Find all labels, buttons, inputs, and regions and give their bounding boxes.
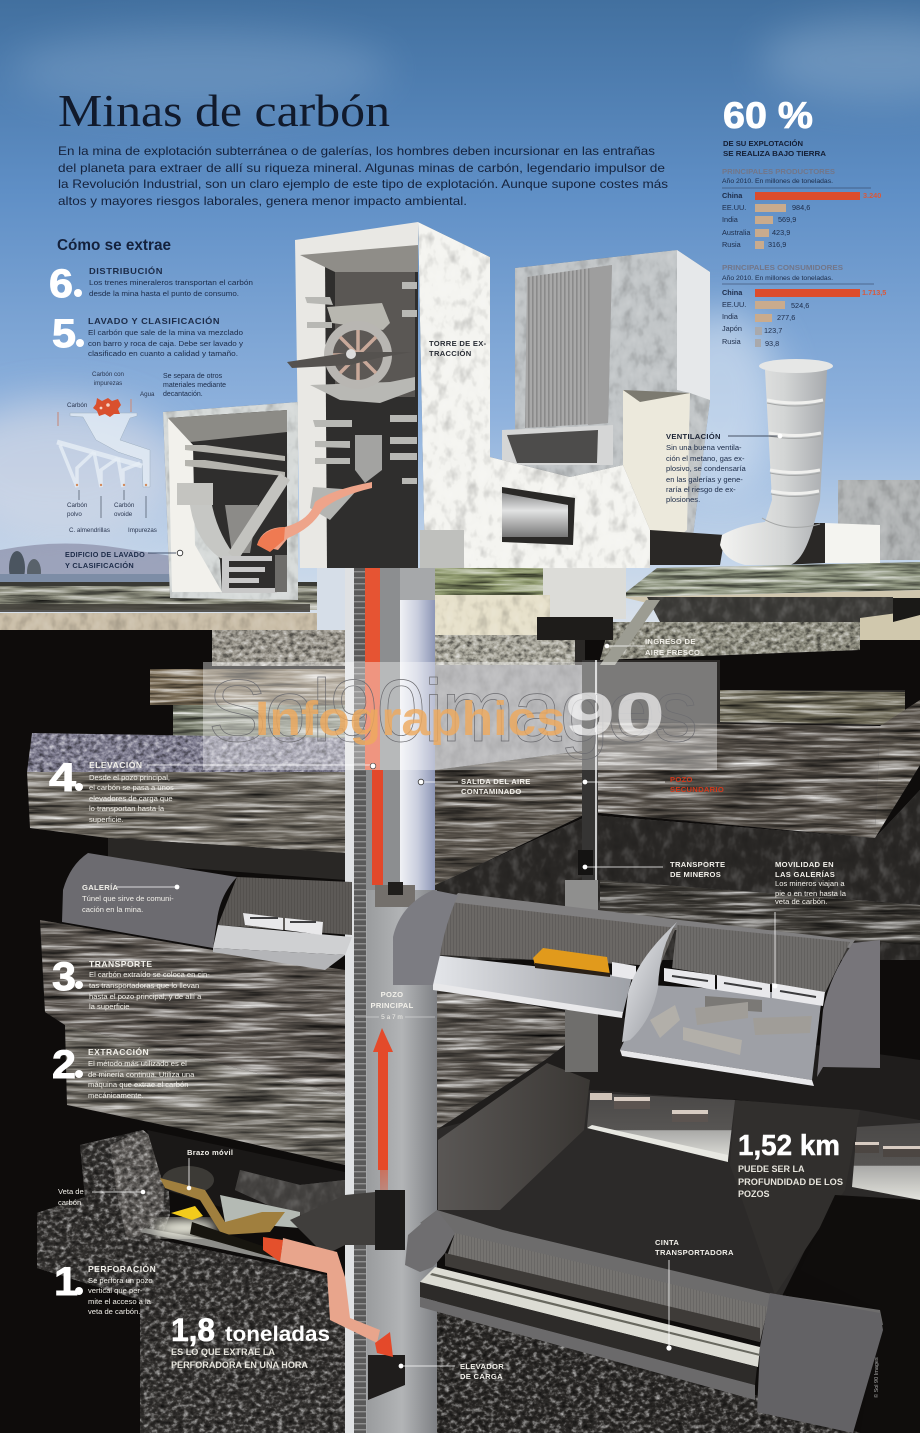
label: fresh air intake: AIRE FRESCO [645, 648, 700, 657]
chamber floor [620, 985, 822, 1080]
orange locomotive [533, 948, 610, 975]
label: ventilation: Sin una buena ventila- [666, 443, 742, 452]
washing diagram: Carbón [114, 502, 135, 509]
label: gallery mobility: veta de carbón. [775, 897, 827, 906]
rock block right of shaft [433, 986, 565, 1132]
step 5 [52, 312, 243, 358]
bar chart: top producers: 569,9 [778, 215, 796, 224]
step 6 [49, 262, 253, 306]
label: contaminated air exit: SALIDA DEL AIRE [461, 777, 531, 786]
label: coal seam: carbón [58, 1198, 81, 1207]
step 1: Se perfora un pozo [88, 1276, 153, 1285]
label: ventilation: plosiones. [666, 495, 700, 504]
stat: 1,52 km: 1,52 km [738, 1130, 840, 1162]
step 2: máquina que extrae el carbón [88, 1080, 188, 1089]
tower shelves [305, 282, 417, 484]
label: main shaft: PRINCIPAL [370, 1001, 414, 1010]
label: coal seam: Veta de [58, 1187, 84, 1196]
lower background mass [433, 990, 920, 1433]
label: gallery mobility: LAS GALERÍAS [775, 870, 835, 879]
bar chart: top consumers: EE.UU. [722, 300, 746, 309]
step 2: mecánicamente. [88, 1091, 144, 1100]
label: ventilation: en las galerías y gene- [666, 475, 743, 484]
step 2: El método más utilizado es el [88, 1059, 187, 1068]
lower rock under conveyor [405, 1300, 860, 1433]
step 4 [49, 756, 376, 824]
intro text: del planeta para extraer de allí su riqueza mineral. Algunas minas de carbón, legendario impulsor de [58, 161, 665, 175]
bar chart: top consumers: India [722, 312, 739, 321]
coal particles [93, 398, 121, 417]
label: ventilation: VENTILACIÓN [666, 432, 721, 441]
step 1: 1 [54, 1260, 78, 1304]
stat: 60 percent: 60 % [723, 95, 813, 136]
step 4: Desde el pozo principal, [89, 773, 170, 782]
label: gallery mobility [773, 860, 847, 988]
mine access box [290, 1190, 405, 1255]
stratum at level 3 [40, 920, 345, 1095]
main gallery arch [393, 890, 458, 985]
stat: 1,52 km: PUEDE SER LA [738, 1164, 805, 1174]
washing diagram: ovoide [114, 511, 133, 518]
hoist frame [327, 303, 390, 330]
stat: 1,8 toneladas: toneladas [225, 1323, 330, 1346]
bar chart: top consumers [722, 263, 886, 348]
label: secondary shaft: POZO [670, 775, 693, 784]
intro text: la Revolución Industrial, son un claro ejemplo de este tipo de explotación. Aunque supone costes más [58, 177, 668, 191]
intro text: altos y mayores riesgos laborales, genera menor impacto ambiental. [58, 194, 467, 208]
surface ground centre [397, 565, 626, 665]
washing diagram: Se separa de otros [163, 373, 223, 380]
stat: 60 percent: SE REALIZA BAJO TIERRA [723, 149, 827, 158]
bar chart: top producers: EE.UU. [722, 203, 746, 212]
step 3: la superficie [89, 1002, 130, 1011]
step 2: 2 [52, 1043, 76, 1087]
bar chart: top consumers: 277,6 [777, 313, 795, 322]
watermark white number: 90 [565, 681, 665, 748]
black underground background [0, 628, 920, 1433]
washing diagram: Carbón [67, 402, 88, 409]
bar chart: top producers: India [722, 215, 739, 224]
label: secondary shaft: SECUNDARIO [670, 785, 724, 794]
surface ground right [600, 562, 920, 660]
label: conveyor belt [655, 1238, 734, 1351]
arrows [58, 399, 131, 426]
bar chart: top producers: 423,9 [772, 228, 790, 237]
bar chart: top producers [722, 167, 881, 249]
washing diagram: impurezas [94, 380, 122, 387]
bar chart: top consumers: Rusia [722, 337, 742, 346]
label: secondary shaft [583, 775, 724, 794]
washing diagram: materiales mediante [163, 382, 226, 389]
label: movable arm [187, 1148, 233, 1190]
stat: 1,52 km [738, 1130, 843, 1199]
subheading: Cómo se extrae [57, 237, 171, 254]
label: coal seam [58, 1187, 145, 1207]
vent housing [650, 480, 920, 565]
upper rock strata left [150, 630, 353, 738]
washing diagram: Impurezas [128, 527, 157, 534]
orange coal path underground [263, 1237, 393, 1357]
conveyor near arch [405, 1210, 455, 1272]
mine chamber with drilling machine [140, 1130, 345, 1272]
secondary shaft [565, 600, 660, 1072]
washing diagram: polvo [67, 511, 82, 518]
bar chart: top producers: 3.240 [863, 191, 881, 200]
stat: 1,52 km: POZOS [738, 1189, 770, 1199]
washing diagram: Agua [140, 391, 155, 398]
stat: 1,8 toneladas [171, 1312, 330, 1370]
label: ventilation: raría el riesgo de ex- [666, 485, 736, 494]
cream column [623, 390, 690, 568]
washing diagram: Carbón con [92, 371, 125, 378]
label: cargo elevator: DE CARGA [460, 1372, 503, 1381]
parked wagons [650, 996, 812, 1055]
credit: © Sol 90 Images [873, 1357, 880, 1398]
bar chart: top consumers: 1.713,5 [862, 288, 886, 297]
label: ventilation: plosivo, se condensaría [666, 464, 747, 473]
intro text [58, 144, 668, 208]
step 4: el carbón se pasa a unos [89, 783, 174, 792]
conveyor far arch [757, 1293, 883, 1433]
bar chart: top producers: Rusia [722, 240, 742, 249]
label: gallery mobility: pie o en tren hasta la [775, 889, 847, 898]
bar chart: top consumers: China [722, 288, 743, 297]
step 3 [52, 955, 210, 1011]
watermark [203, 661, 717, 770]
label: main shaft: 5 a 7 m [381, 1014, 403, 1021]
back tunnel with wagons [587, 1093, 735, 1162]
label: gallery: GALERÍA [82, 883, 118, 892]
label: cargo elevator: ELEVADOR [460, 1362, 504, 1371]
stat: 1,8 toneladas: PERFORADORA EN UNA HORA [171, 1360, 308, 1370]
step 6: Los trenes mineraleros transportan el carbón [89, 278, 253, 287]
label: contaminated air exit [418, 777, 531, 796]
step 1: veta de carbón. [88, 1307, 140, 1316]
label: gallery mobility: Los mineros viajan a [775, 879, 845, 888]
bar chart: top producers: PRINCIPALES PRODUCTORES [722, 167, 835, 176]
dark cylindrical tunnel [438, 1063, 590, 1210]
step 1: mite el acceso a la [88, 1297, 152, 1306]
watermark orange wordmark: Infographics [255, 693, 565, 746]
step 2: de minería continua. Utiliza una [88, 1070, 195, 1079]
bar chart: top consumers: PRINCIPALES CONSUMIDORES [722, 263, 843, 272]
label: movable arm: Brazo móvil [187, 1148, 233, 1157]
step 3: hasta el pozo principal, y de allí a [89, 992, 202, 1001]
label: miner transport: DE MINEROS [670, 870, 721, 879]
label: extraction tower: TORRE DE EX- [429, 339, 487, 348]
step 6: DISTRIBUCIÓN [89, 265, 163, 276]
step 2: EXTRACCIÓN [88, 1046, 149, 1057]
central white block with duct [418, 222, 650, 568]
stat: 1,52 km: PROFUNDIDAD DE LOS [738, 1177, 843, 1187]
bar chart: top consumers: Año 2010. En millones de toneladas. [722, 275, 833, 282]
label: miner transport [583, 860, 725, 879]
intro text: En la mina de explotación subterránea o de galerías, los hombres deben incursionar en las entrañas [58, 144, 655, 158]
label: washing building: EDIFICIO DE LAVADO [65, 550, 145, 559]
right back tunnel with wagons [852, 1123, 920, 1200]
label: ventilation [666, 432, 782, 504]
label: main shaft [355, 990, 435, 1021]
strata right of the main shaft [435, 660, 920, 960]
label: washing building: Y CLASIFICACIÓN [65, 561, 134, 570]
step 5: El carbón que sale de la mina va mezclado [88, 328, 243, 337]
stat: 1,8 toneladas: 1,8 [171, 1312, 215, 1348]
stratum at level 2 [65, 1025, 345, 1165]
label: contaminated air exit: CONTAMINADO [461, 787, 522, 796]
main shaft [345, 568, 437, 1433]
step 1: PERFORACIÓN [88, 1263, 156, 1274]
stat: 60 percent: DE SU EXPLOTACIÓN [723, 139, 803, 148]
step 3: tas transportadoras que lo llevan [89, 981, 199, 990]
step 2 [52, 1043, 195, 1100]
washing diagram: Carbón [67, 502, 88, 509]
washing diagram: decantación. [163, 391, 203, 398]
coal seam rock [37, 1130, 350, 1433]
cargo elevator [368, 1355, 405, 1400]
bar chart: top producers: Año 2010. En millones de toneladas. [722, 178, 833, 185]
surface ground left [0, 568, 347, 638]
step 4: elevadores de carga que [89, 794, 173, 803]
main gallery and chamber [393, 890, 880, 1086]
conveyor tunnel [405, 1210, 883, 1433]
tower extraction interior [287, 222, 418, 568]
watermark outlined wordmark: Sol90images [208, 661, 698, 760]
white passenger cars [612, 962, 825, 1006]
right building [502, 250, 710, 568]
label: gallery [82, 883, 179, 914]
bar chart: top producers: Australia [722, 228, 751, 237]
label: fresh air intake [605, 637, 700, 657]
step 3: TRANSPORTE [89, 959, 153, 969]
label: gallery: cación en la mina. [82, 905, 143, 914]
washing diagram: C. almendrillas [69, 527, 110, 534]
orange coal path surface [257, 482, 372, 552]
stratum at level 4 [27, 733, 350, 880]
washing building [163, 402, 372, 600]
loading chute [310, 487, 357, 520]
bar chart: top consumers: Japón [722, 324, 742, 333]
label: ventilation: ción el metano, gas ex- [666, 454, 745, 463]
washing diagram [57, 371, 226, 534]
step 6: desde la mina hasta el punto de consumo. [89, 289, 239, 298]
label: conveyor belt: CINTA [655, 1238, 679, 1247]
distant horizon with trees [0, 543, 172, 585]
label: fresh air intake: INGRESO DE [645, 637, 696, 646]
label: conveyor belt: TRANSPORTADORA [655, 1248, 734, 1257]
sky background [0, 0, 920, 640]
label: washing building [65, 550, 183, 570]
label: main shaft: POZO [381, 990, 403, 999]
bar chart: top consumers: 123,7 [764, 326, 782, 335]
step 5: clasificado en cuanto a calidad y tamaño. [88, 349, 238, 358]
left gallery arch [62, 853, 237, 948]
elevator box [355, 435, 382, 483]
chamber far arch [817, 940, 880, 1077]
bar chart: top consumers: 524,6 [791, 301, 809, 310]
step 4: lo transportan hasta la [89, 804, 165, 813]
step 5: con barro y roca de caja. Debe ser lavado y [88, 339, 243, 348]
step 4: superficie. [89, 815, 124, 824]
label: extraction tower [429, 339, 487, 358]
left gallery [62, 853, 352, 970]
step 6: 6 [49, 262, 73, 306]
louvered facade [525, 265, 612, 428]
step 5: 5 [52, 312, 76, 356]
title: Minas de carbón [58, 85, 390, 136]
bar chart: top consumers: 93,8 [765, 339, 779, 348]
label: gallery: Túnel que sirve de comuni- [82, 894, 174, 903]
step 4: 4 [49, 756, 77, 800]
bar chart: top producers: China [722, 191, 743, 200]
left gallery train [243, 913, 323, 935]
step 5: LAVADO Y CLASIFICACIÓN [88, 315, 220, 326]
step 4: ELEVACIÓN [89, 759, 142, 770]
step 1: vertical que per- [88, 1286, 143, 1295]
label: gallery mobility: MOVILIDAD EN [775, 860, 834, 869]
label: miner transport: TRANSPORTE [670, 860, 725, 869]
step 3: El carbón extraído se coloca en cin- [89, 970, 210, 979]
ventilation chimney [720, 359, 833, 565]
stat: 60 percent [723, 95, 827, 158]
label: extraction tower: TRACCIÓN [429, 349, 471, 358]
hoist wheel [287, 321, 412, 389]
lower louvered block [502, 425, 613, 465]
chamber near arch [622, 922, 677, 1042]
stat: 1,8 toneladas: ES LO QUE EXTRAE LA [171, 1347, 276, 1357]
orange arrow up main shaft [365, 480, 393, 1190]
step 3: 3 [52, 955, 76, 999]
bar chart: top producers: 316,9 [768, 240, 786, 249]
bar chart: top producers: 984,6 [792, 203, 810, 212]
label: cargo elevator [399, 1362, 504, 1381]
step 1 [54, 1260, 156, 1316]
